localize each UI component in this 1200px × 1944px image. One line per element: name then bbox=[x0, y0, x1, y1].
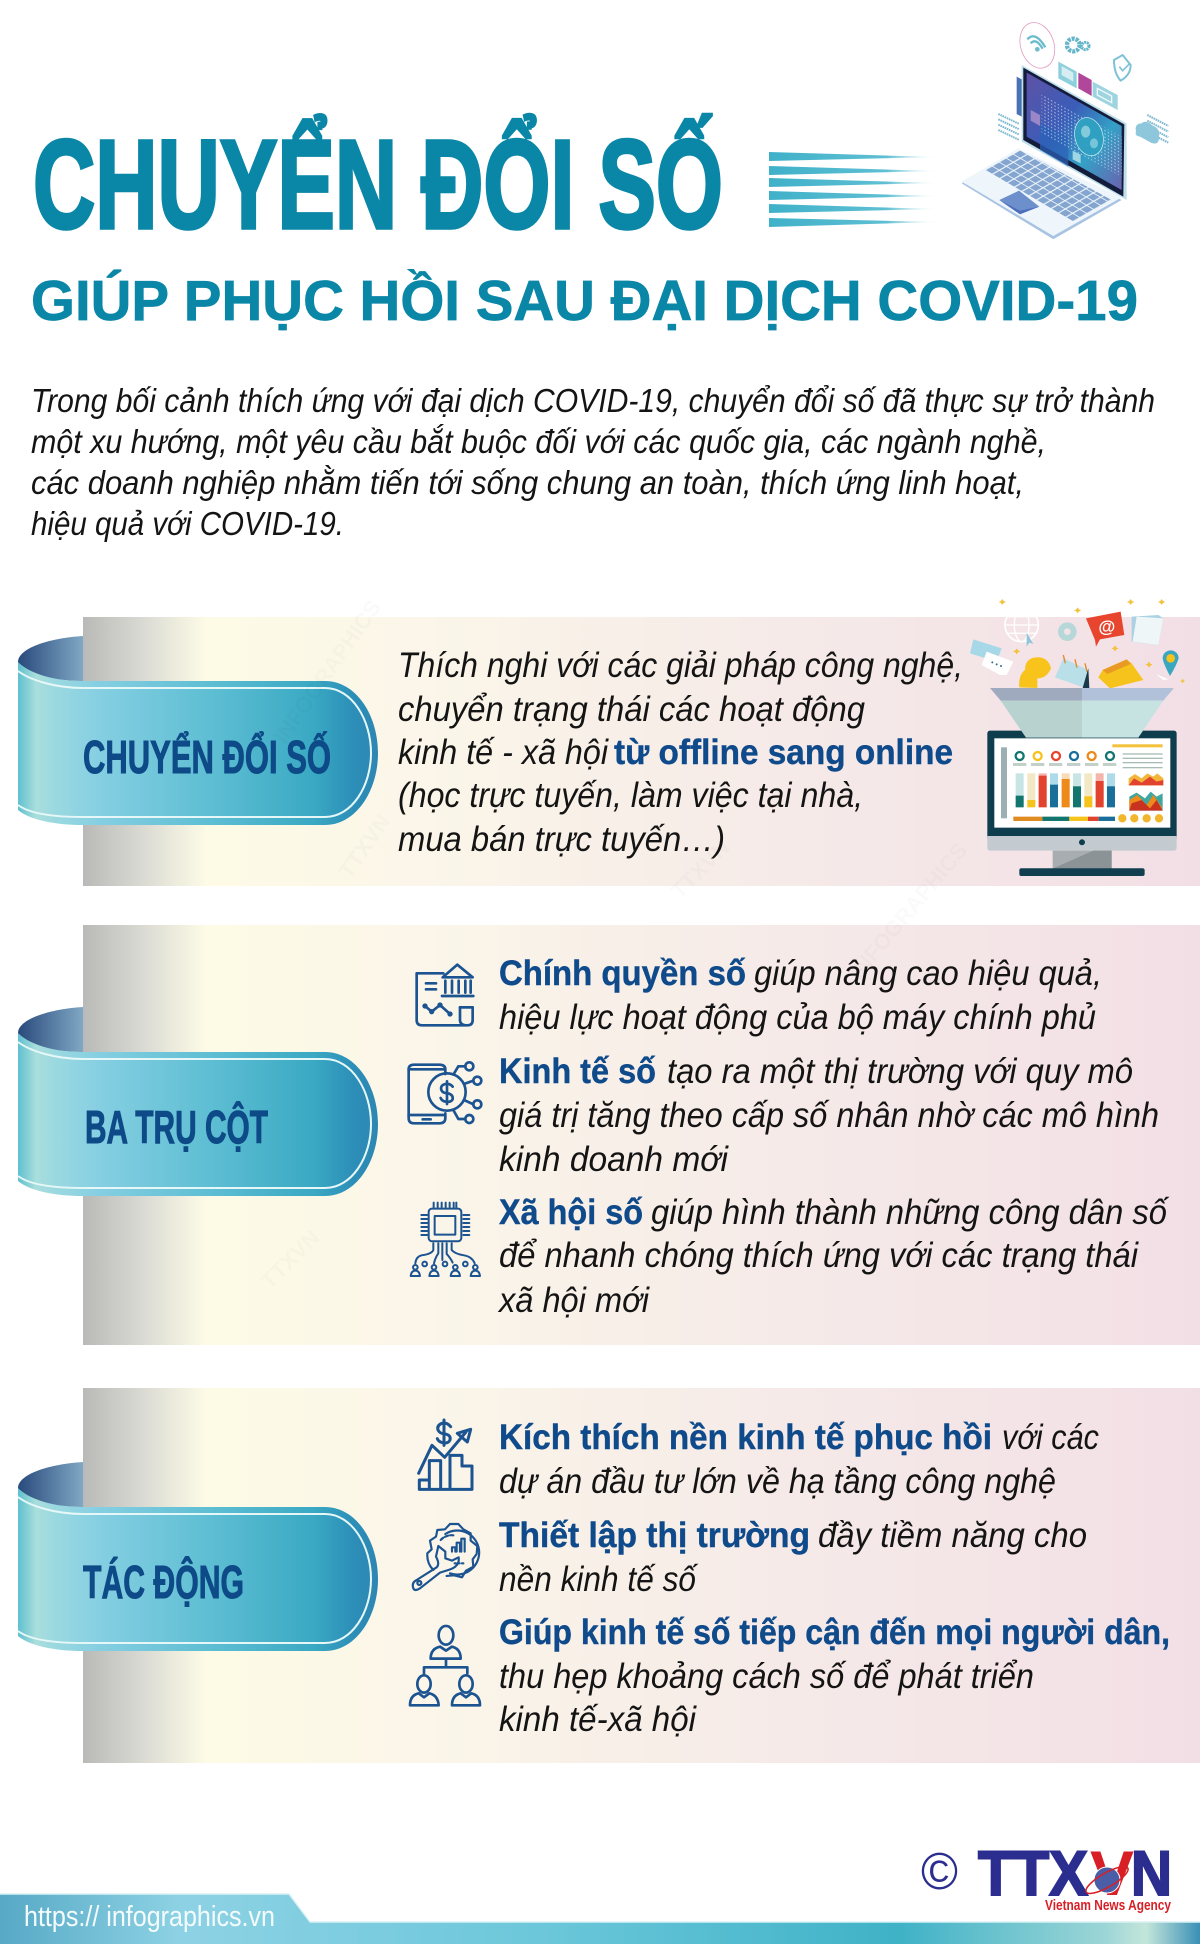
text block: kinh tế - xã hội bbox=[398, 733, 609, 772]
text block: kinh tế-xã hội bbox=[499, 1700, 697, 1739]
logo: TTXVN bbox=[921, 1839, 1172, 1914]
text block: Thiết lập thị trường bbox=[499, 1516, 810, 1555]
text block: giá trị tăng theo cấp số nhân nhờ các mô hình bbox=[499, 1096, 1159, 1135]
text block: xã hội mới bbox=[497, 1281, 650, 1320]
intro text block: các doanh nghiệp nhằm tiến tới sống chung an toàn, thích ứng linh hoạt, bbox=[31, 464, 1024, 501]
text block: chuyển trạng thái các hoạt động bbox=[398, 690, 865, 729]
icon: economic growth bbox=[419, 1420, 472, 1489]
text block: để nhanh chóng thích ứng với các trạng thái bbox=[499, 1236, 1139, 1275]
text block: từ offline sang online bbox=[614, 733, 953, 772]
ribbon: ba trụ cột bbox=[18, 1007, 378, 1196]
panel: tác động bbox=[18, 1388, 1200, 1763]
text block bbox=[497, 954, 1169, 1320]
intro text block: một xu hướng, một yêu cầu bắt buộc đối với các quốc gia, các ngành nghề, bbox=[31, 423, 1046, 460]
icon: laptop illustration bbox=[962, 18, 1168, 239]
text block bbox=[499, 1418, 1170, 1739]
text block: thu hẹp khoảng cách số để phát triển bbox=[499, 1657, 1034, 1696]
icon: digital government bbox=[417, 965, 473, 1025]
text block: giúp hình thành những công dân số bbox=[651, 1193, 1169, 1232]
title: CHUYỂN ĐỔI SỐ: CHUYỂN ĐỔI SỐ bbox=[33, 114, 723, 255]
speed lines arrow bbox=[769, 152, 937, 227]
logo: TTXVN: © bbox=[921, 1843, 958, 1901]
text block: Xã hội số bbox=[499, 1193, 643, 1232]
intro text block bbox=[31, 382, 1155, 542]
text block: đầy tiềm năng cho bbox=[818, 1516, 1087, 1555]
icon: funnel and monitor: @ bbox=[1098, 617, 1115, 637]
ribbon: chuyển đổi số bbox=[18, 636, 378, 825]
text block: Chính quyền số bbox=[499, 954, 746, 993]
text block: với các bbox=[1002, 1418, 1099, 1457]
icon: funnel and monitor bbox=[970, 599, 1185, 876]
text block: Kích thích nền kinh tế phục hồi bbox=[499, 1418, 992, 1457]
ribbon: ba trụ cột: BA TRỤ CỘT bbox=[85, 1101, 268, 1153]
logo: TTXVN: N bbox=[1131, 1839, 1172, 1909]
ribbon: tác động: TÁC ĐỘNG bbox=[83, 1556, 244, 1608]
watermarks: INFOGRAPHICS bbox=[845, 838, 972, 983]
watermarks bbox=[256, 595, 972, 1294]
icon: people hierarchy bbox=[410, 1626, 480, 1705]
watermarks: TTXVN bbox=[334, 809, 395, 883]
footer url: https:// infographics.vn bbox=[24, 1901, 275, 1933]
text block: kinh doanh mới bbox=[499, 1140, 729, 1179]
icon: digital society bbox=[411, 1203, 480, 1276]
text block: Kinh tế số bbox=[499, 1052, 656, 1091]
intro text block: hiệu quả với COVID-19. bbox=[31, 505, 344, 542]
logo: TTXVN: TTX bbox=[978, 1839, 1088, 1909]
watermarks: INFOGRAPHICS bbox=[269, 595, 386, 748]
text block: hiệu lực hoạt động của bộ máy chính phủ bbox=[499, 998, 1096, 1037]
text block: (học trực tuyến, làm việc tại nhà, bbox=[398, 776, 863, 815]
subtitle: GIÚP PHỤC HỒI SAU ĐẠI DỊCH COVID-19 bbox=[31, 268, 1138, 333]
text block: Thích nghi với các giải pháp công nghệ, bbox=[398, 646, 963, 685]
icon: digital economy bbox=[409, 1062, 481, 1123]
text block: giúp nâng cao hiệu quả, bbox=[754, 954, 1102, 993]
footer bar bbox=[0, 1894, 1200, 1944]
text block: dự án đầu tư lớn về hạ tầng công nghệ bbox=[499, 1462, 1056, 1501]
text block: nền kinh tế số bbox=[499, 1560, 698, 1599]
icon: market setup bbox=[413, 1524, 479, 1590]
ribbon: tác động bbox=[18, 1462, 378, 1651]
ribbon: chuyển đổi số: CHUYỂN ĐỔI SỐ bbox=[83, 731, 331, 783]
text block: mua bán trực tuyến…) bbox=[398, 820, 725, 859]
panel: ba trụ cột bbox=[18, 925, 1200, 1345]
text block bbox=[398, 646, 963, 859]
panel: chuyển đổi số bbox=[18, 599, 1200, 886]
watermarks: TTXVN bbox=[666, 835, 735, 904]
logo: TTXVN: V bbox=[1090, 1839, 1134, 1909]
logo: TTXVN: Vietnam News Agency bbox=[1045, 1897, 1172, 1914]
text block: tạo ra một thị trường với quy mô bbox=[667, 1052, 1133, 1091]
watermarks: TTXVN bbox=[256, 1225, 325, 1294]
